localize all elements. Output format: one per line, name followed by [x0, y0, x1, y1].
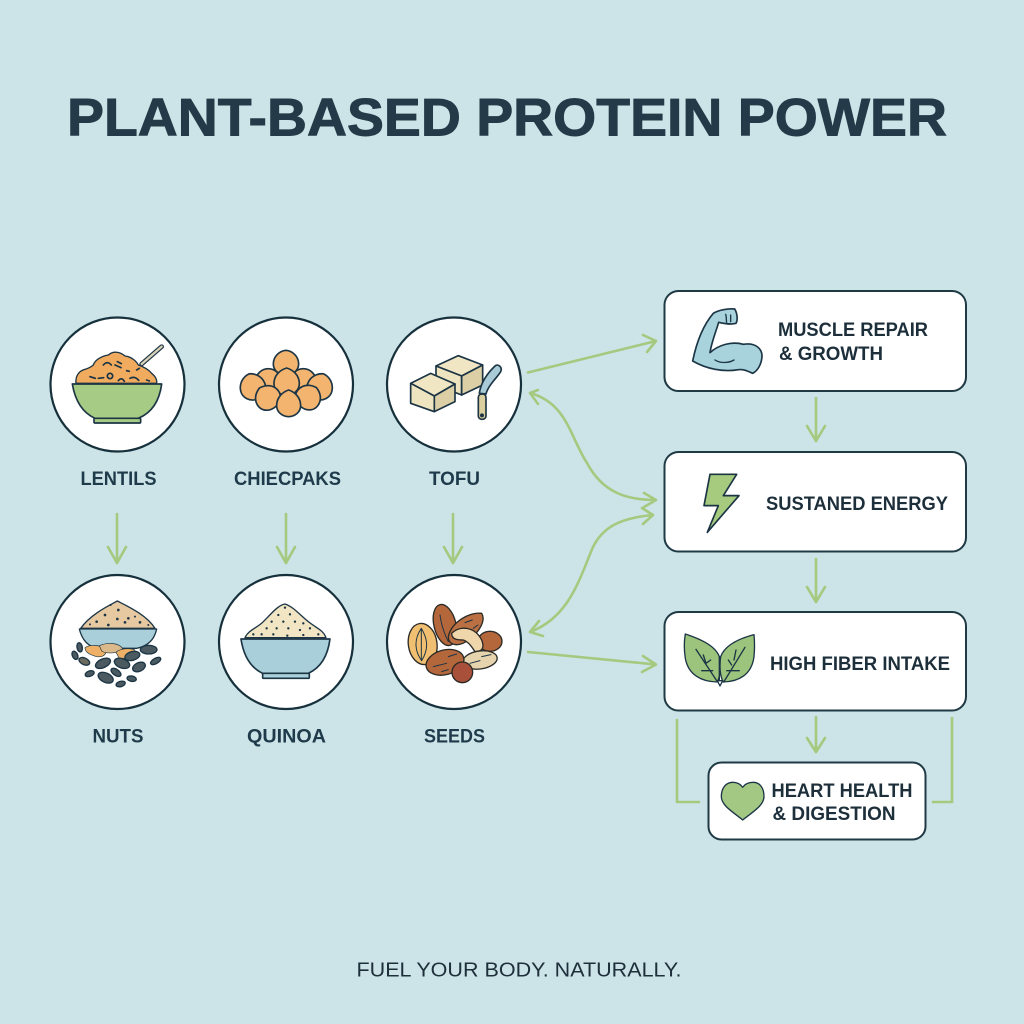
- text: high fiber intake: HIGH FIBER INTAKE: [770, 653, 950, 675]
- icon: quinoa bowl: [241, 604, 330, 678]
- text: muscle repair & growth: MUSCLE REPAIR: [778, 319, 928, 341]
- arrow: lentils to nuts: [108, 514, 126, 563]
- panel: tofu: [387, 318, 521, 452]
- connector: right bracket: [933, 718, 952, 802]
- icon: chickpeas: [237, 350, 336, 417]
- arrow: muscle to energy: [807, 398, 825, 441]
- text: muscle repair & growth: [778, 319, 928, 365]
- panel: heart health: [708, 762, 926, 840]
- arrow: chickpeas to quinoa: [277, 514, 295, 563]
- icon: mixed nuts: [406, 602, 502, 683]
- arrow: tofu to seeds: [444, 514, 462, 563]
- icon: flexed arm: [693, 309, 762, 373]
- arrow: tofu to muscle repair: [528, 335, 656, 372]
- icon: tofu and knife: [411, 356, 501, 419]
- label: lentils: LENTILS: [80, 468, 156, 490]
- arrow: energy to fiber: [807, 559, 825, 602]
- panel: seeds: [387, 575, 521, 709]
- icon: lightning bolt: [704, 474, 739, 532]
- title: PLANT-BASED PROTEIN POWER: [67, 88, 947, 148]
- panel: high fiber: [664, 612, 966, 710]
- arrow: fiber to heart: [807, 717, 825, 752]
- text: sustained energy: SUSTANED ENERGY: [766, 493, 948, 515]
- connector: left bracket: [677, 720, 699, 802]
- text: heart health & digestion: HEART HEALTH: [772, 780, 912, 802]
- icon: heart: [721, 782, 764, 820]
- label: seeds: SEEDS: [424, 726, 485, 748]
- icon: lentil bowl: [72, 347, 162, 423]
- panel: sustained energy: [664, 452, 966, 552]
- icon: seeds and bowl: [71, 601, 162, 688]
- footer tagline: FUEL YOUR BODY. NATURALLY.: [356, 958, 682, 982]
- label: nuts: NUTS: [92, 726, 144, 748]
- arrow: tofu and sustained energy curve: [530, 390, 656, 507]
- icon: leaves: [684, 634, 754, 686]
- text: muscle repair & growth: & GROWTH: [779, 343, 883, 365]
- label: quinoa: QUINOA: [247, 726, 326, 748]
- label: tofu: TOFU: [429, 468, 480, 490]
- arrow: seeds to high fiber: [528, 652, 656, 672]
- panel: nuts: [50, 575, 184, 709]
- text: heart health & digestion: & DIGESTION: [772, 803, 896, 825]
- text: heart health & digestion: [772, 780, 912, 825]
- panel: chickpeas: [219, 318, 353, 452]
- panel: muscle repair: [664, 291, 966, 391]
- label: chickpeas: CHIECPAKS: [234, 468, 341, 490]
- arrow: seeds and sustained energy curve: [530, 508, 653, 636]
- panel: lentils: [50, 318, 184, 452]
- panel: quinoa: [219, 575, 353, 709]
